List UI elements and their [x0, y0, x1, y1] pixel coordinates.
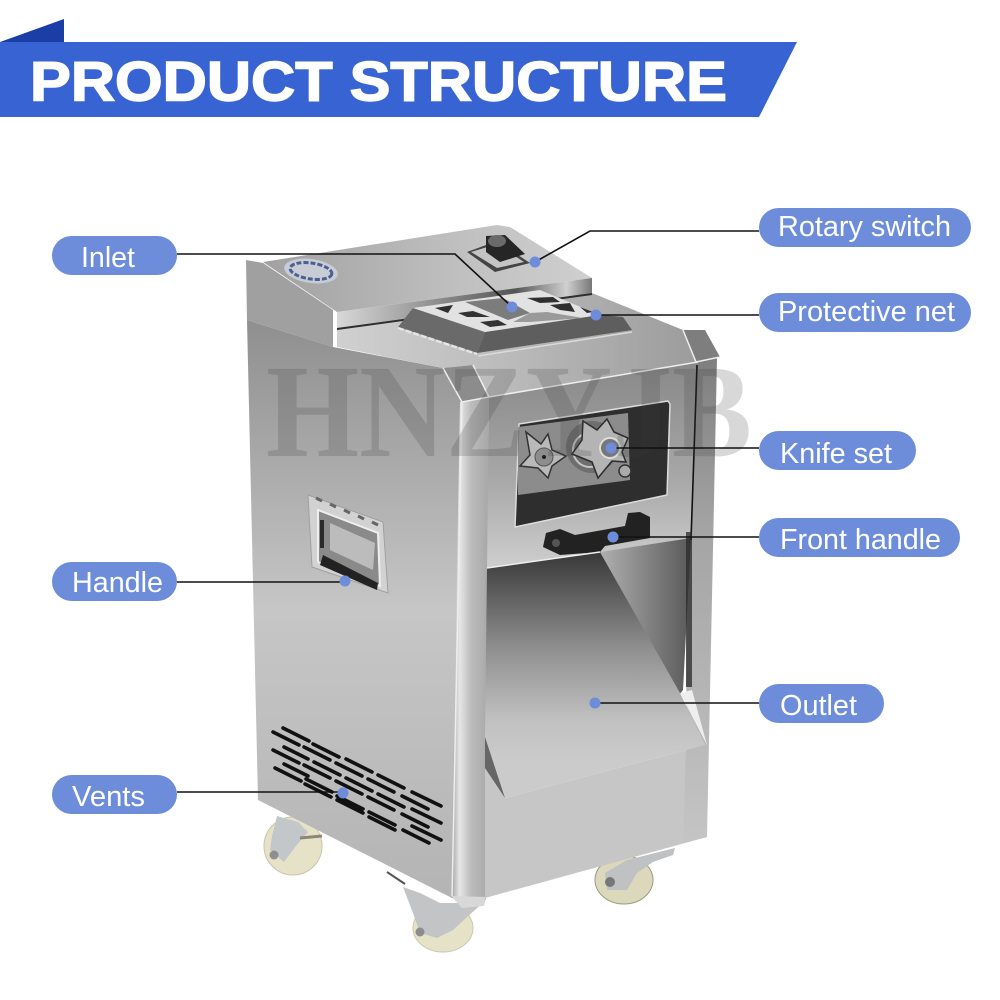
banner fold triangle	[0, 19, 64, 42]
hood front strip	[337, 278, 592, 328]
right pillar slot	[686, 532, 692, 687]
callout: Handle	[52, 562, 350, 601]
callout: Rotary switch: Rotary switch	[778, 211, 951, 243]
callout: Knife set	[606, 431, 916, 470]
callout: Protective net	[590, 293, 971, 332]
knob left	[520, 432, 566, 478]
callout: Front handle	[608, 518, 960, 557]
rotary switch	[467, 235, 530, 272]
outlet right highlight	[680, 690, 707, 745]
top chamfer right	[683, 330, 720, 362]
bottom corner plate	[451, 896, 486, 908]
corner pillar	[451, 397, 489, 900]
title: PRODUCT STRUCTURE	[30, 50, 727, 112]
front panel	[487, 362, 698, 568]
right pillar	[683, 357, 717, 843]
deck	[337, 293, 696, 397]
caster: back right	[595, 848, 675, 904]
callout: Handle: Handle	[72, 567, 163, 599]
header banner	[0, 19, 797, 117]
hood top	[263, 225, 592, 312]
top chamfer left	[443, 365, 488, 402]
chute flap	[485, 737, 505, 798]
knife set	[518, 413, 631, 495]
knob right	[566, 419, 628, 478]
caster: front	[387, 872, 483, 952]
divider line front	[691, 365, 697, 540]
logo badge	[283, 255, 339, 287]
watermark: HNZYJB	[266, 337, 752, 485]
callout: Vents	[52, 775, 348, 814]
bolt	[619, 465, 631, 477]
inlet block	[398, 290, 632, 356]
callout: Front handle: Front handle	[780, 524, 941, 556]
side handle	[308, 495, 388, 593]
callout: Protective net: Protective net	[778, 296, 955, 328]
callout: Inlet: Inlet	[81, 242, 135, 274]
pillar highlight	[443, 330, 720, 896]
hood shadow line	[337, 294, 592, 329]
banner ribbon	[0, 42, 797, 117]
protective net	[413, 290, 600, 332]
vents	[273, 728, 441, 843]
callout: Rotary switch	[530, 208, 971, 268]
callout: Inlet	[52, 236, 518, 312]
callout: Vents: Vents	[72, 781, 145, 813]
caster: back left	[264, 816, 322, 875]
lower front panel	[485, 737, 707, 898]
outlet side wall	[600, 538, 691, 694]
outlet chute	[485, 552, 705, 798]
front handle	[543, 512, 650, 555]
callout: Knife set: Knife set	[780, 438, 892, 470]
callout: Outlet: Outlet	[780, 690, 857, 722]
machine illustration	[246, 225, 720, 952]
hood side	[246, 260, 333, 347]
callout: Outlet	[590, 684, 884, 723]
knife window	[515, 401, 670, 527]
left side panel	[247, 320, 462, 898]
